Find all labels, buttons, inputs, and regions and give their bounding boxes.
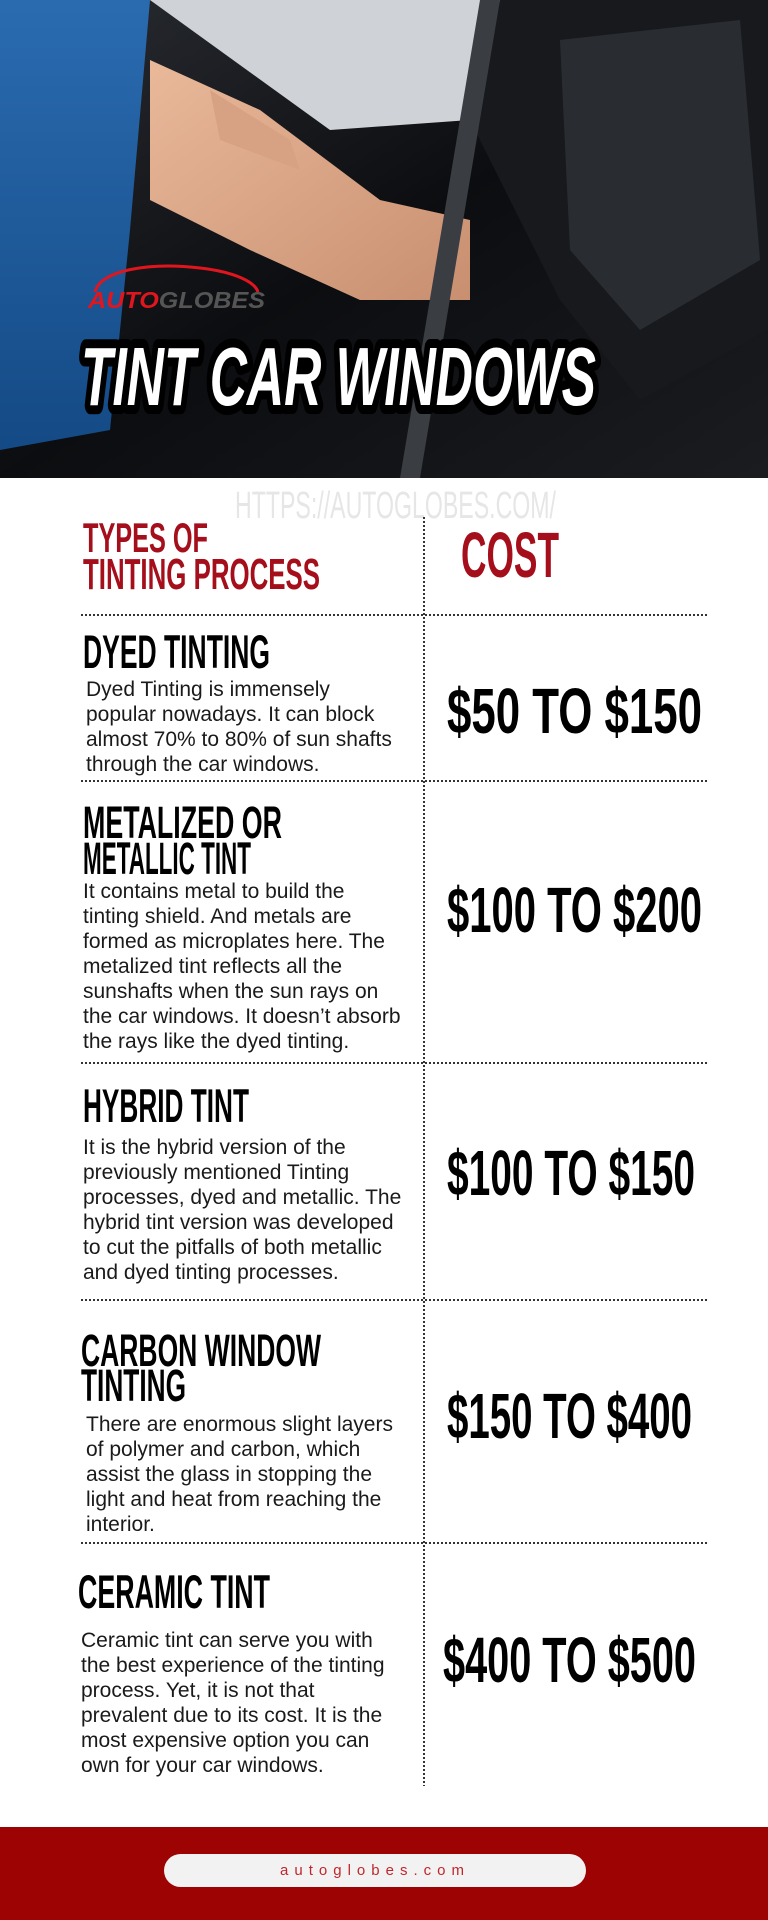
body: metalized: metalized tint reflects all the [83,955,342,978]
body: carbon: of polymer and carbon, which [86,1438,360,1461]
row titles: HYBRID TINT [83,1079,249,1132]
body: hybrid [83,1136,401,1284]
body: metalized: the car windows. It doesn’t absorb [83,1005,401,1028]
header: types of tinting process: TYPES OF [83,514,208,561]
body: ceramic [81,1629,385,1777]
body: dyed: almost 70% to 80% of sun shafts [86,728,392,751]
logo: autoglobes [87,264,266,313]
row titles: METALLIC TINT [83,833,251,884]
body: carbon: light and heat from reaching the [86,1488,381,1511]
header: types of tinting process [83,514,320,599]
body: metalized: formed as microplates here. The [83,930,385,953]
body: carbon: assist the glass in stopping the [86,1463,372,1486]
row titles [78,625,321,1618]
body: hybrid: It is the hybrid version of the [83,1136,346,1159]
body: carbon: There are enormous slight layers [86,1413,393,1436]
row titles: CERAMIC TINT [78,1565,270,1618]
body: ceramic: process. Yet, it is not that [81,1679,314,1702]
header: types of tinting process: TINTING PROCESS [83,550,320,599]
body: metalized: sunshafts when the sun rays on [83,980,378,1003]
body: ceramic: own for your car windows. [81,1754,324,1777]
body: dyed: popular nowadays. It can block [86,703,374,726]
hero photo [0,0,768,478]
logo: autoglobes: AUTO GLOBES [87,287,266,313]
body: metalized: It contains metal to build the [83,880,344,903]
body: hybrid: to cut the pitfalls of both metallic [83,1236,382,1259]
footer pill: autoglobes.com: autoglobes.com [280,1862,470,1879]
row titles: TINTING [81,1360,186,1411]
row titles: DYED TINTING [83,625,270,678]
row titles: METALIZED OR [83,797,282,848]
footer pill: autoglobes.com [164,1854,586,1887]
body: ceramic: prevalent due to its cost. It is the [81,1704,382,1727]
body: hybrid: hybrid tint version was developed [83,1211,394,1234]
body: ceramic: Ceramic tint can serve you with [81,1629,373,1652]
body: dyed: through the car windows. [86,753,319,776]
body: ceramic: the best experience of the tinting [81,1654,385,1677]
body: dyed [86,678,392,776]
body: carbon [86,1413,393,1536]
body: metalized [83,880,401,1053]
body: carbon: interior. [86,1513,155,1536]
row titles: CARBON WINDOW [81,1325,321,1376]
prices [443,675,702,1696]
body: metalized: tinting shield. And metals are [83,905,352,928]
body: hybrid: previously mentioned Tinting [83,1161,349,1184]
body: hybrid: and dyed tinting processes. [83,1261,339,1284]
url watermark: HTTPS://AUTOGLOBES.COM/ [235,485,556,527]
header: cost: COST [461,519,559,591]
footer [0,1827,768,1920]
table content [78,485,707,1786]
body: hybrid: processes, dyed and metallic. The [83,1186,401,1209]
body: dyed: Dyed Tinting is immensely [86,678,330,701]
body: ceramic: most expensive option you can [81,1729,369,1752]
body: metalized: the rays like the dyed tinting. [83,1030,349,1053]
